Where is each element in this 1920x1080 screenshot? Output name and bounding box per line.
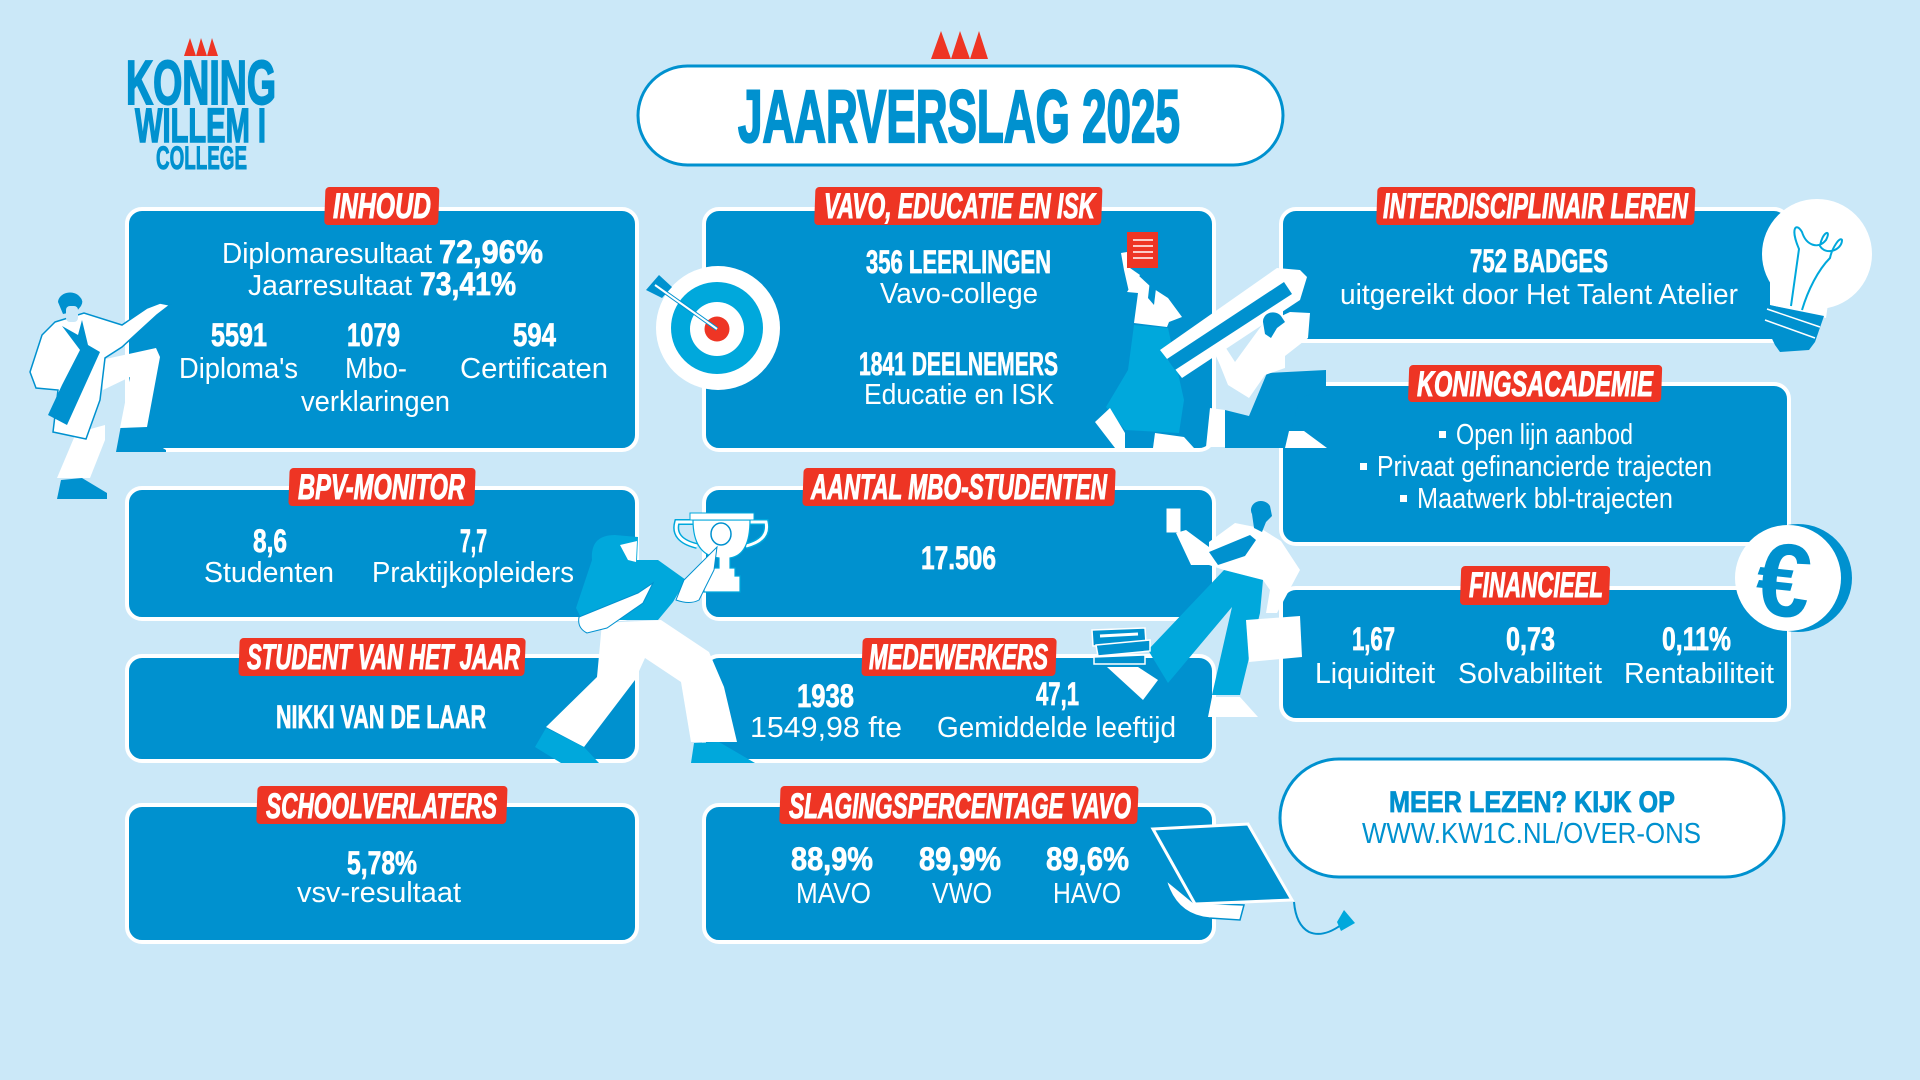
panel: Koningsacademie: Open lijn aanbod	[1456, 419, 1633, 451]
panel: Financieel: 0,73	[1506, 621, 1555, 657]
panel: Slagingspercentage vavo	[704, 786, 1214, 942]
panel: Inhoud: 594	[513, 317, 556, 353]
panel: Inhoud: 1079	[347, 317, 400, 353]
panel: Financieel: 1,67	[1352, 621, 1395, 657]
panel: Schoolverlaters	[127, 786, 637, 942]
panel: Inhoud: Certificaten	[460, 353, 608, 385]
panel: Aantal mbo-studenten	[704, 468, 1214, 619]
icon: euro coin: €	[1751, 520, 1817, 641]
panel: Slagingspercentage vavo: MAVO	[796, 878, 871, 910]
heading: Medewerkers: MEDEWERKERS	[869, 638, 1048, 677]
heading: Medewerkers	[861, 638, 1057, 677]
heading: Schoolverlaters: SCHOOLVERLATERS	[266, 787, 497, 826]
icon: person carrying pencil	[1160, 268, 1327, 448]
panel: Inhoud: Mbo-	[345, 353, 407, 385]
panel: Vavo, educatie en ISK: 1841 DEELNEMERS	[859, 346, 1058, 382]
panel: Inhoud	[127, 187, 637, 450]
panel: Financieel: Rentabiliteit	[1624, 658, 1774, 690]
heading: Koningsacademie: KONINGSACADEMIE	[1417, 365, 1654, 404]
panel: Slagingspercentage vavo: HAVO	[1053, 878, 1121, 910]
panel: Koningsacademie	[1281, 365, 1789, 544]
panel: Inhoud: 72,96%	[439, 234, 543, 270]
panel: Inhoud: Jaarresultaat	[248, 270, 412, 302]
icon: man with books and briefcase	[1092, 501, 1302, 717]
icon: graduate figure	[30, 293, 170, 499]
logo: Koning Willem I College	[126, 38, 276, 176]
panel: BPV-monitor: 8,6	[253, 523, 287, 559]
panel: Schoolverlaters: vsv-resultaat	[297, 877, 461, 909]
panel: Vavo, educatie en ISK: Vavo-college	[880, 278, 1038, 310]
heading: Interdisciplinair leren: INTERDISCIPLINAIR LEREN	[1383, 187, 1688, 226]
panel: Koningsacademie: Privaat gefinancierde trajecten	[1377, 451, 1712, 483]
heading: Interdisciplinair leren	[1376, 187, 1695, 226]
panel: Koningsacademie: Maatwerk bbl-trajecten	[1417, 483, 1673, 515]
heading: Vavo, educatie en ISK: VAVO, EDUCATIE EN ISK	[824, 187, 1097, 226]
logo: Koning Willem I College: KONING	[126, 49, 276, 118]
panel: BPV-monitor: Studenten	[204, 557, 334, 589]
panel: Schoolverlaters: 5,78%	[347, 845, 417, 881]
panel: Slagingspercentage vavo: 89,9%	[919, 841, 1001, 877]
heading: BPV-monitor: BPV-MONITOR	[298, 468, 465, 507]
panel: Financieel: Solvabiliteit	[1458, 658, 1602, 690]
logo: Koning Willem I College: WILLEM I	[135, 100, 266, 153]
panel: Medewerkers: 47,1	[1036, 676, 1079, 712]
heading: Inhoud: INHOUD	[333, 187, 431, 226]
panel: Medewerkers	[704, 638, 1214, 761]
heading: Financieel: FINANCIEEL	[1469, 566, 1603, 605]
callout: meer lezen: WWW.KW1C.NL/OVER-ONS	[1362, 818, 1701, 850]
icon: light bulb	[1762, 199, 1872, 352]
heading: Koningsacademie	[1408, 365, 1662, 404]
panel: Medewerkers: 1938	[797, 678, 854, 714]
icon: person holding document	[1095, 232, 1194, 448]
icon: graduation cap	[1153, 824, 1355, 934]
panel: Inhoud: Diplomaresultaat	[222, 238, 432, 270]
panel: Student van het jaar	[127, 638, 637, 761]
panel: BPV-monitor: 7,7	[460, 523, 487, 559]
panel: Medewerkers: Gemiddelde leeftijd	[937, 712, 1176, 744]
panel: Slagingspercentage vavo: 88,9%	[791, 841, 873, 877]
panel: Medewerkers: 1549,98 fte	[750, 712, 902, 744]
panel: Financieel	[1281, 566, 1789, 720]
heading: Aantal mbo-studenten: AANTAL MBO-STUDENTEN	[810, 468, 1107, 507]
panel: BPV-monitor	[127, 468, 637, 619]
panel: Student van het jaar: NIKKI VAN DE LAAR	[276, 699, 486, 735]
heading: Student van het jaar	[238, 638, 526, 677]
panel: Slagingspercentage vavo: 89,6%	[1046, 841, 1129, 877]
panel: Inhoud: 73,41%	[420, 266, 516, 302]
panel: Financieel: Liquiditeit	[1315, 658, 1435, 690]
panel: BPV-monitor: Praktijkopleiders	[372, 557, 574, 589]
panel: Inhoud: Diploma's	[179, 353, 298, 385]
heading: Student van het jaar: STUDENT VAN HET JAAR	[247, 638, 520, 677]
logo: Koning Willem I College: COLLEGE	[156, 140, 247, 176]
heading: Schoolverlaters	[256, 786, 508, 826]
callout: meer lezen: MEER LEZEN? KIJK OP	[1389, 786, 1675, 819]
heading: Financieel	[1460, 566, 1610, 605]
panel: Inhoud: verklaringen	[301, 386, 450, 418]
title: Jaarverslag 2025: JAARVERSLAG 2025	[738, 75, 1180, 158]
heading: Vavo, educatie en ISK	[814, 187, 1102, 226]
panel: Vavo, educatie en ISK: Educatie en ISK	[864, 379, 1055, 411]
panel: Slagingspercentage vavo: VWO	[932, 878, 992, 910]
panel: Aantal mbo-studenten: 17.506	[921, 540, 996, 576]
panel: Vavo, educatie en ISK: 356 LEERLINGEN	[866, 244, 1051, 280]
heading: Slagingspercentage vavo	[779, 786, 1139, 826]
panel: Interdisciplinair leren: uitgereikt door Het Talent Atelier	[1340, 279, 1738, 311]
panel: Interdisciplinair leren: 752 BADGES	[1470, 243, 1608, 279]
heading: Slagingspercentage vavo: SLAGINGSPERCENTAGE VAVO	[789, 787, 1131, 826]
panel: Inhoud: 5591	[211, 317, 267, 353]
heading: Aantal mbo-studenten	[802, 468, 1116, 507]
icon: woman with trophy	[535, 513, 767, 763]
icon: target with arrow	[646, 266, 780, 390]
icon: euro coin	[1735, 520, 1852, 641]
panel: Vavo, educatie en ISK	[704, 187, 1214, 450]
panel: Interdisciplinair leren	[1281, 187, 1789, 341]
title: Jaarverslag 2025	[638, 31, 1283, 165]
heading: BPV-monitor	[288, 468, 476, 507]
panel: Financieel: 0,11%	[1662, 621, 1731, 657]
callout: meer lezen	[1280, 759, 1784, 877]
